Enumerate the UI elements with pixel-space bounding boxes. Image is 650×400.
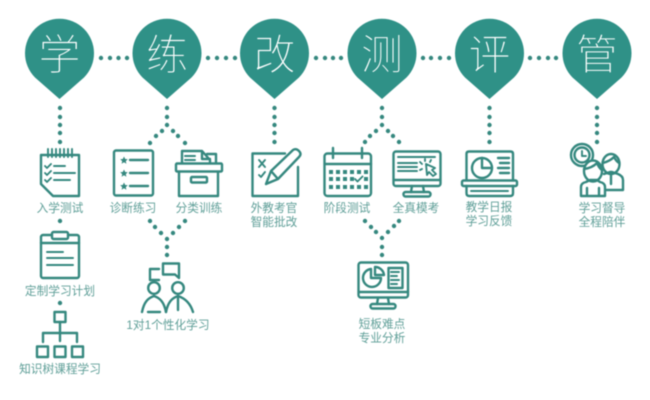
pin: 测: 测 (361, 32, 403, 78)
label: 全真模考: 全真模考 (393, 201, 439, 215)
label: 分类训练: 分类训练 (176, 201, 223, 215)
label: 学习督导全程陪伴: 全程陪伴 (579, 215, 626, 229)
pin: 改: 改 (253, 32, 296, 78)
icon: file box (176, 151, 222, 196)
label: 短板难点专业分析 (359, 317, 406, 345)
label: 外教考官智能批改: 外教考官 (251, 201, 297, 215)
pin: 评 (455, 19, 524, 99)
icon: pencil grading (252, 149, 300, 196)
label: 学习督导全程陪伴: 学习督导 (579, 201, 626, 215)
label: 定制学习计划: 定制学习计划 (25, 284, 95, 298)
horizontal dotted connectors (99, 56, 558, 60)
pin: 练 (132, 19, 202, 99)
icon: laptop report (462, 152, 517, 196)
label: 1对1个性化学习: 1对1个性化学习 (126, 318, 210, 332)
label: 学习督导全程陪伴 (579, 201, 626, 229)
label: 诊断练习: 诊断练习 (110, 201, 156, 215)
vertical and branching dotted connectors (58, 106, 599, 305)
pin: 学: 学 (38, 32, 81, 78)
icon: clipboard plan (41, 232, 79, 278)
label: 外教考官智能批改 (251, 201, 298, 229)
pin: 测 (348, 19, 416, 99)
label: 阶段测试: 阶段测试 (324, 201, 371, 215)
icon: knowledge tree (37, 312, 83, 357)
label: 知识树课程学习: 知识树课程学习 (19, 362, 101, 376)
label: 教学日报学习反馈: 教学日报 (466, 200, 513, 214)
icon: star list (114, 150, 153, 196)
label: 外教考官智能批改: 智能批改 (251, 215, 298, 229)
icon: one-on-one tutoring (142, 264, 193, 312)
icon: desktop mock exam (394, 152, 440, 196)
icon: notebook checklist (41, 149, 79, 196)
icon: calendar (324, 148, 371, 196)
label: 教学日报学习反馈: 学习反馈 (466, 214, 513, 228)
icon: monitor analysis (358, 262, 408, 308)
pin: 练: 练 (146, 32, 188, 78)
pin: 管 (562, 19, 632, 99)
label: 教学日报学习反馈 (466, 200, 513, 228)
pin: 学 (25, 19, 94, 99)
label: 短板难点专业分析: 专业分析 (359, 331, 406, 345)
icon: clock and people (571, 144, 623, 196)
pin: 改 (240, 19, 309, 99)
pin: 评: 评 (468, 32, 511, 78)
label: 短板难点专业分析: 短板难点 (359, 317, 406, 331)
label: 入学测试: 入学测试 (37, 201, 84, 215)
pin: 管: 管 (576, 32, 618, 78)
